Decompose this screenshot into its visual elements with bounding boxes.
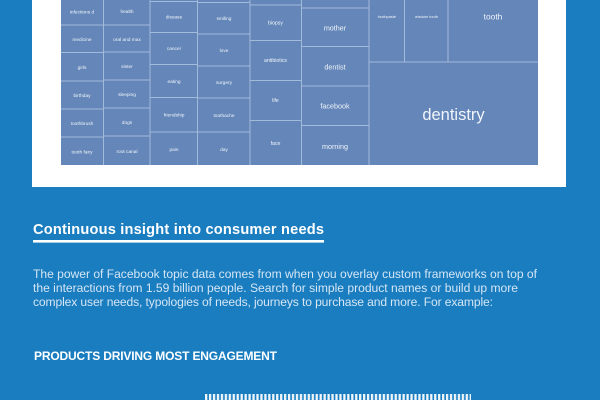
column 3: disease [166, 14, 183, 20]
text block: intro paragraph: complex user needs, typologies of needs, journeys to purchase and more. For example: [33, 295, 493, 309]
treemap chart [60, 0, 539, 166]
column 4: smiling [217, 16, 232, 22]
column 1: infections d [70, 10, 94, 16]
panel: treemap card [32, 0, 566, 187]
top right group: wisdom tooth [415, 14, 438, 19]
column 5 [250, 4, 301, 145]
column 5: antibiotics [264, 58, 287, 64]
column 5: life [272, 98, 279, 104]
column 2: health [120, 9, 134, 15]
column 4: day [220, 147, 228, 153]
column 1: birthday [73, 93, 91, 99]
column 2: sister [121, 64, 133, 70]
column 4: toothache [213, 113, 235, 119]
dentistry block: dentistry [422, 106, 485, 124]
column 5: face [271, 141, 281, 147]
column 2 [104, 10, 150, 153]
column 1 [61, 10, 103, 154]
column 1: medicine [72, 37, 92, 43]
column 6: mother [324, 24, 347, 32]
column 3: friendship [164, 112, 185, 118]
column 1: girls [78, 65, 87, 71]
text block: intro paragraph: the interactions from 1.59 billion people. Search for simple product names or build up more [33, 281, 518, 295]
top right group [378, 0, 502, 62]
text block: intro paragraph [33, 267, 538, 309]
column 1: tooth fairy [71, 150, 93, 156]
column 2: oral and max [113, 37, 141, 43]
top right group: toothpaste [378, 14, 396, 19]
column 3: pain [169, 147, 179, 153]
subheading: PRODUCTS DRIVING MOST ENGAGEMENT [34, 349, 278, 363]
column 2: sleeping [118, 92, 136, 98]
column 6: facebook [320, 102, 350, 110]
striped bar [205, 394, 471, 400]
column 3: cancer [167, 46, 182, 52]
column 3 [150, 1, 197, 152]
heading: Continuous insight into consumer needs [33, 222, 324, 238]
column 4: love [220, 48, 229, 54]
column 6: morning [322, 142, 348, 151]
text block: intro paragraph: The power of Facebook topic data comes from when you overlay custom frameworks on top of [33, 267, 538, 281]
column 5: biopsy [268, 20, 283, 26]
column 1: toothbrush [71, 121, 94, 127]
top right group: tooth [484, 12, 503, 22]
column 4 [198, 2, 250, 152]
column 6: dentist [324, 62, 346, 72]
column 2: dogs [122, 120, 133, 126]
column 6 [302, 8, 368, 150]
column 4: surgery [216, 80, 233, 86]
column 2: root canal [116, 149, 138, 155]
column 3: eating [167, 79, 181, 85]
